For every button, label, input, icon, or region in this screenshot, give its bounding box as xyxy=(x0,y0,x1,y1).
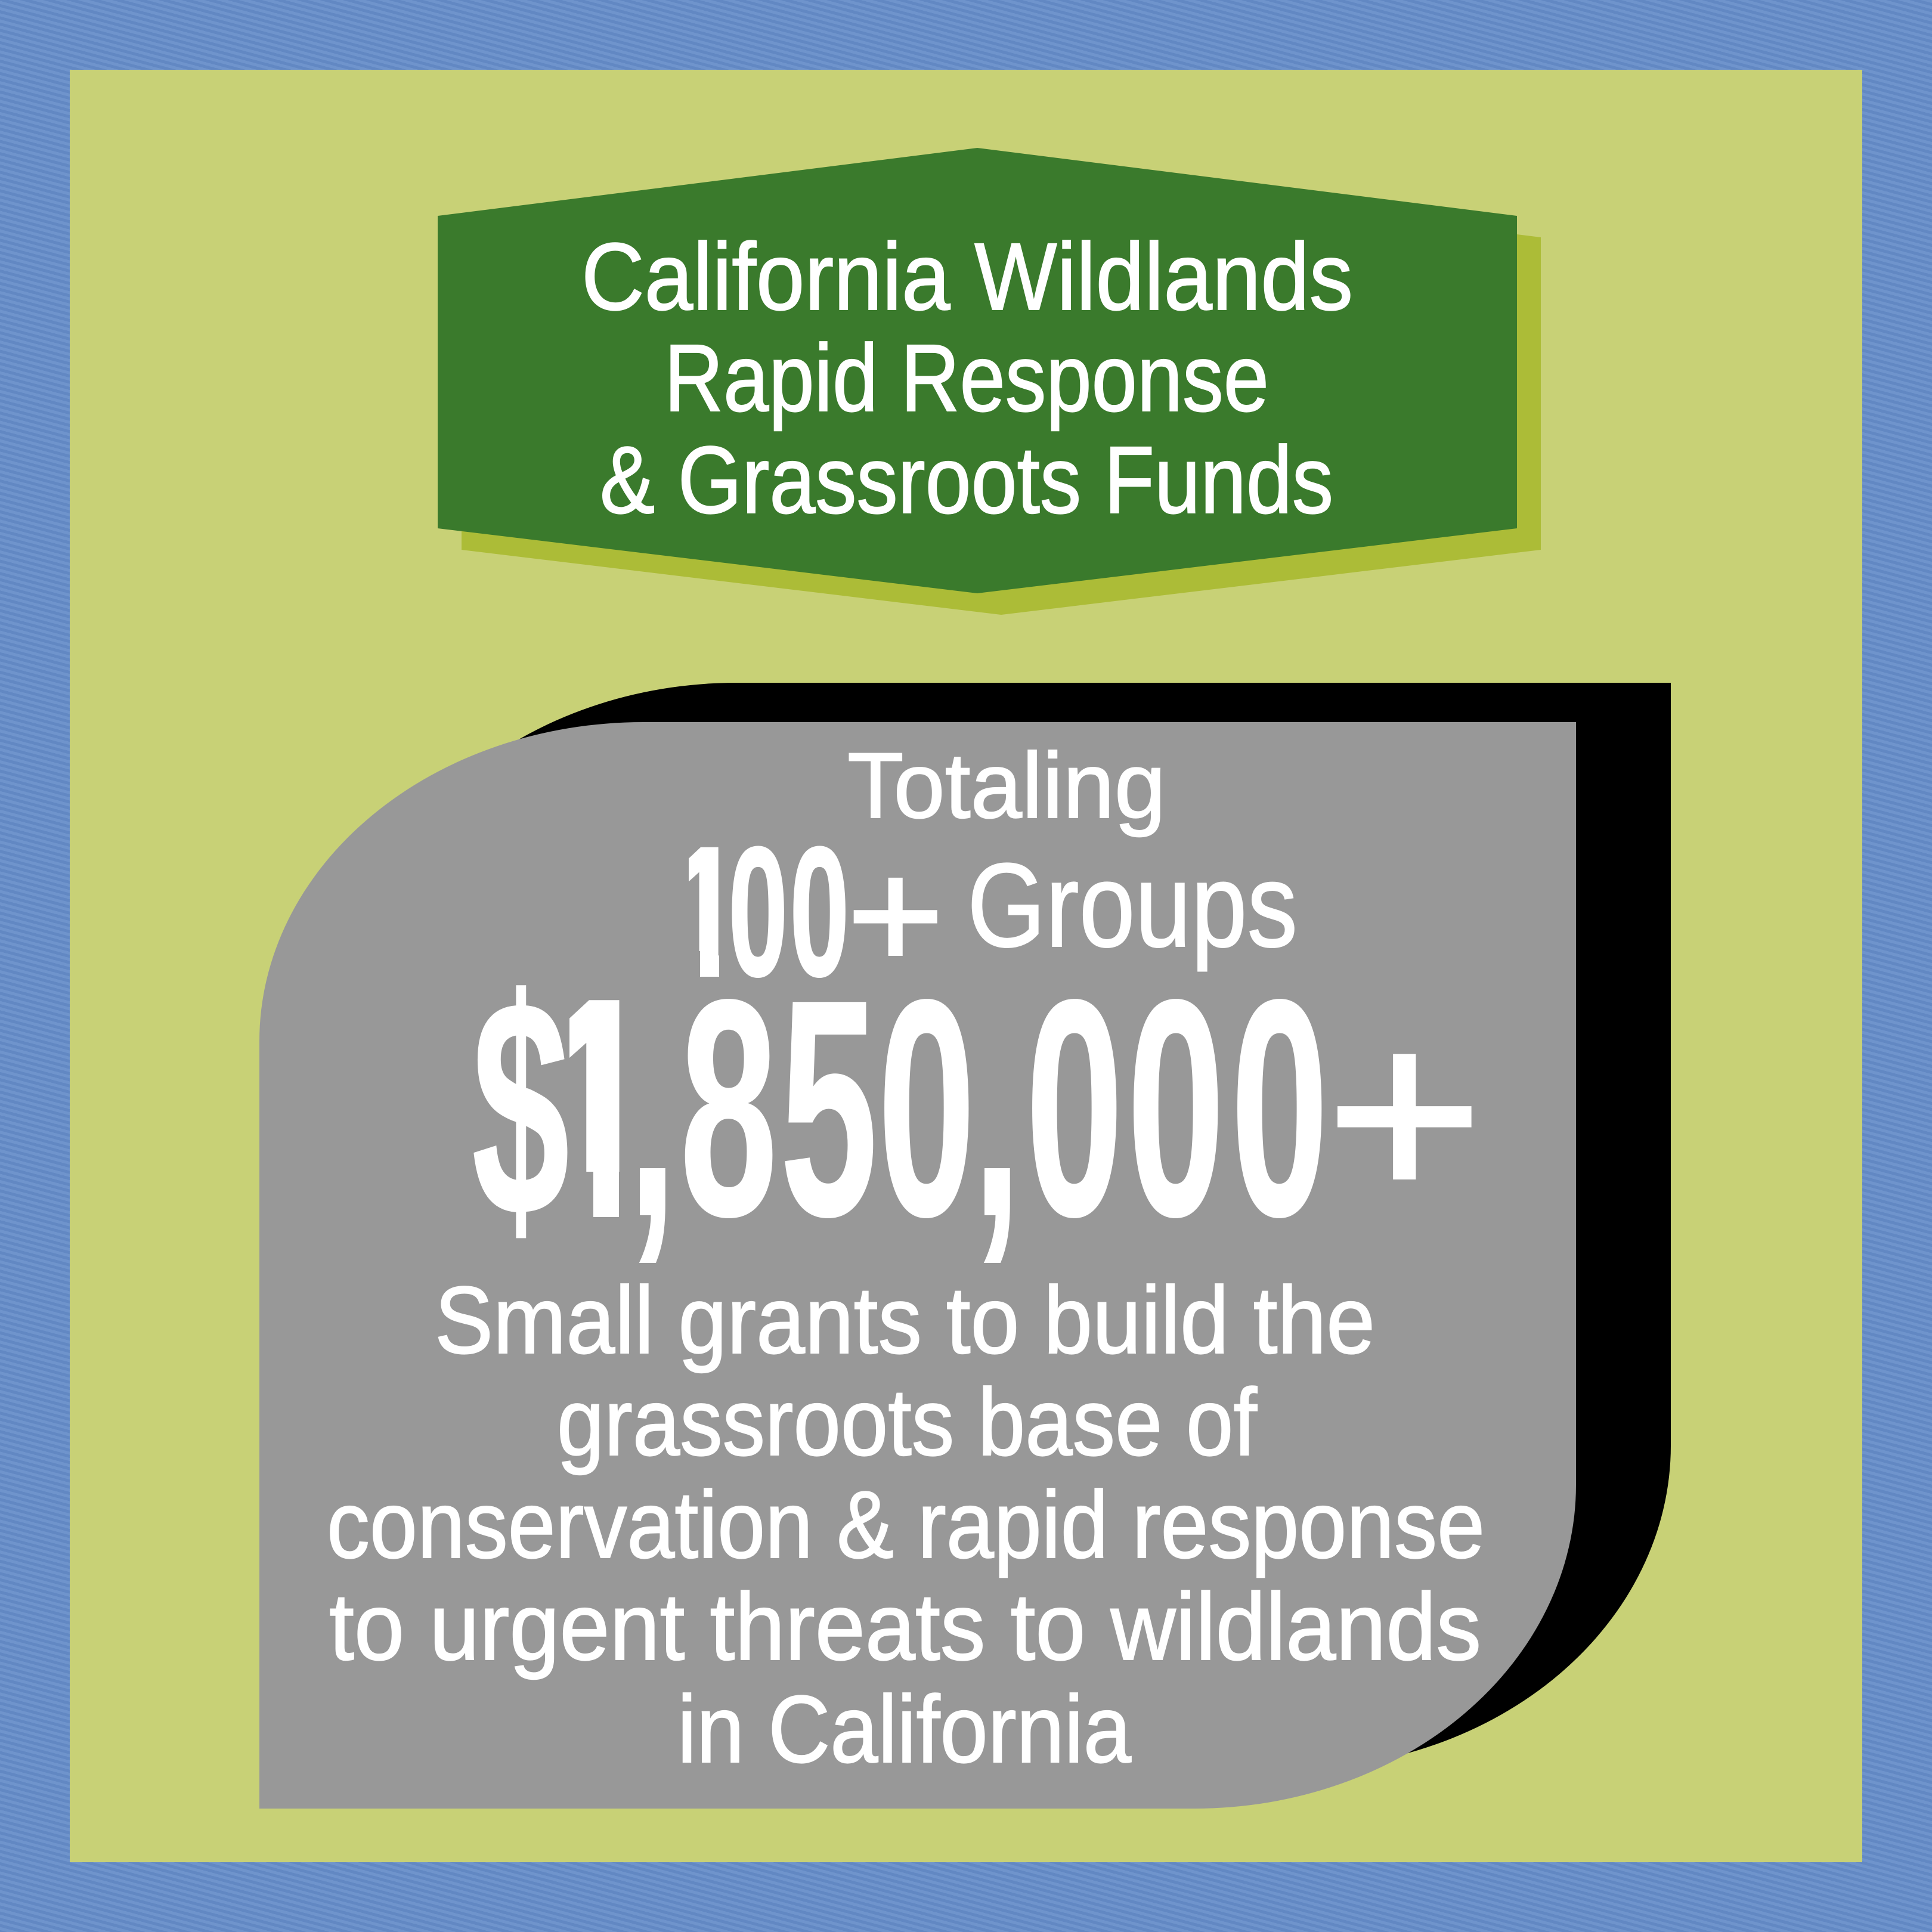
stat: total amount: + xyxy=(1326,974,1483,1253)
stat: group count: 00 xyxy=(728,808,850,1015)
text: description: grassroots base of xyxy=(557,1368,1257,1475)
stat: total amount: ,850,000 xyxy=(628,936,1329,1281)
banner hexagon xyxy=(438,148,1517,593)
text: description xyxy=(327,1267,1485,1782)
text: description: in California xyxy=(677,1676,1131,1782)
stat: group count: 1 xyxy=(670,809,741,1015)
text: description: to urgent threats to wildlands xyxy=(329,1573,1481,1680)
text: description: Small grants to build the xyxy=(435,1267,1375,1373)
banner title text: & Grassroots Funds xyxy=(600,426,1333,533)
stat: group count: Groups xyxy=(967,839,1298,972)
banner title text xyxy=(581,223,1353,533)
title banner xyxy=(438,148,1541,615)
stat: total amount xyxy=(472,936,1483,1281)
stat: total amount: $ xyxy=(472,936,569,1281)
banner title text: California Wildlands xyxy=(581,223,1353,330)
text: description: conservation & rapid response xyxy=(327,1471,1485,1578)
card black shadow xyxy=(354,683,1671,1769)
stat: group count xyxy=(670,808,1298,1015)
panel: funding summary card xyxy=(259,683,1671,1809)
text: totaling: Totaling xyxy=(847,734,1166,838)
card grey body xyxy=(259,722,1576,1809)
banner title text: Rapid Response xyxy=(664,324,1269,431)
banner shadow xyxy=(462,169,1541,615)
stat: group count: + xyxy=(847,828,945,1002)
stat: total amount: 1 xyxy=(538,936,658,1280)
